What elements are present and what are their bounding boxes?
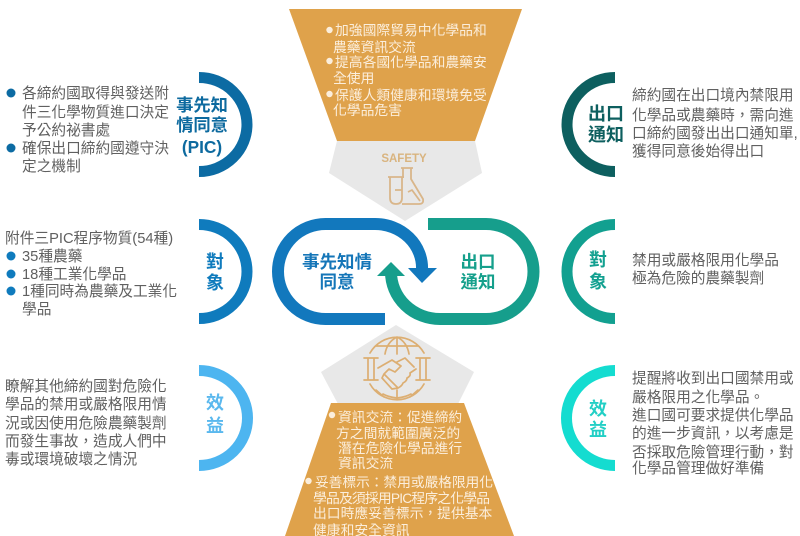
- arc label: 對: [206, 252, 224, 272]
- benefits text: 潛在危險化學品進行: [338, 441, 462, 456]
- text: 締約國在出口境內禁限用: [632, 86, 794, 104]
- arc label: 通知: [588, 125, 624, 145]
- objectives text: 農藥資訊交流: [333, 39, 416, 55]
- text: 件三化學物質進口決定: [22, 103, 169, 121]
- arc label: 象: [206, 273, 224, 293]
- text: 1種同時為農藥及工業化: [22, 283, 177, 300]
- right pillar: [416, 358, 430, 380]
- text: [632, 86, 798, 160]
- globe top: [370, 337, 424, 354]
- test tube and flask: [388, 168, 423, 204]
- arc: [199, 224, 247, 318]
- text: 的進一步資訊，以考慮是: [632, 425, 794, 442]
- benefits text: 方之間就範圍廣泛的: [336, 425, 460, 441]
- text: [632, 251, 779, 287]
- arc label: [589, 399, 607, 440]
- text: 獲得同意後始得出口: [632, 142, 764, 160]
- centre label: export notification: 出口: [460, 252, 496, 272]
- text: [632, 370, 794, 477]
- benefits text: 資訊交流: [338, 455, 393, 471]
- panel: left benefits: [5, 370, 248, 468]
- objectives text: 化學品危害: [333, 103, 402, 118]
- benefits text: 出口時應妥善標示，提供基本: [313, 505, 493, 521]
- text: 毒或環境破壞之情況: [5, 450, 138, 468]
- text: [5, 229, 177, 318]
- arc: [567, 224, 615, 318]
- text: 提醒將收到出口國禁用或: [632, 370, 794, 387]
- centre label: prior informed consent: 同意: [320, 272, 354, 292]
- arc label: [206, 252, 224, 293]
- text: 極為危險的農藥製劑: [632, 270, 764, 287]
- text: 化學品管理做好準備: [632, 459, 764, 477]
- arc: [199, 370, 248, 466]
- panel: top safety pentagon: [329, 141, 482, 221]
- text: 予公約祕書處: [22, 122, 110, 139]
- panel: bottom benefits trapezoid: [285, 403, 514, 536]
- arc label: [588, 104, 624, 145]
- text: 況或因使用危險農藥製劑: [5, 415, 167, 432]
- text: 35種農藥: [22, 248, 82, 265]
- teal loop arrow: [377, 224, 534, 319]
- text: 附件三PIC程序物質(54種): [5, 229, 173, 247]
- panel: left target substances: [5, 224, 247, 318]
- text: 瞭解其他締約國對危險化: [5, 378, 167, 395]
- objectives text: 全使用: [333, 70, 374, 86]
- bullets: [6, 252, 16, 296]
- benefits bullets: [305, 412, 335, 484]
- arc: [566, 370, 615, 466]
- safety label: SAFETY: [381, 153, 427, 165]
- handshake: [378, 358, 416, 389]
- arc label: 效: [206, 393, 224, 413]
- arc: [567, 78, 615, 172]
- bullets: [6, 88, 16, 152]
- panel: top objectives trapezoid: [289, 9, 522, 141]
- text: 學品: [22, 300, 51, 318]
- arc label: (PIC): [182, 137, 222, 157]
- arc label: [176, 95, 228, 157]
- text: 確保出口締約國遵守決: [22, 139, 169, 157]
- text: 否採取危險管理行動，對: [632, 443, 794, 461]
- arc label: 出口: [588, 104, 624, 124]
- text: 化學品或農藥時，需向進: [632, 106, 794, 124]
- arc label: [589, 250, 607, 292]
- text: 進口國可要求提供化學品: [632, 406, 794, 424]
- arc label: 象: [589, 272, 607, 292]
- panel: bottom handshake pentagon: [321, 325, 474, 404]
- arc: [199, 78, 247, 172]
- text: 嚴格限用之化學品。: [632, 388, 764, 406]
- text: [22, 85, 169, 175]
- arc label: 情同意: [176, 115, 228, 135]
- benefits text: 資訊交流：促進締約: [338, 409, 462, 425]
- objectives text: 保護人類健康和環境免受: [335, 87, 487, 103]
- text: 而發生事故，造成人們中: [5, 433, 167, 450]
- arc label: 事先知: [176, 95, 228, 115]
- objectives bullets: [326, 27, 333, 97]
- benefits text: 妥善標示：禁用或嚴格限用化: [315, 474, 493, 490]
- trapezoid shape: [285, 403, 514, 536]
- benefits text: 學品及須採用PIC程序之化學品: [313, 491, 490, 506]
- text: [5, 378, 167, 468]
- arc label: [206, 393, 224, 436]
- objectives text: 提高各國化學品和農藥安: [335, 54, 487, 70]
- icon: safety flask: [381, 153, 427, 204]
- arc label: 效: [589, 399, 607, 419]
- text: 18種工業化學品: [22, 265, 126, 283]
- centre label: export notification: [460, 252, 496, 292]
- text: 各締約國取得與發送附: [22, 85, 169, 102]
- centre label: export notification: 通知: [460, 272, 496, 292]
- globe bottom: [370, 384, 424, 400]
- benefits text: [313, 409, 493, 536]
- left pillar: [364, 358, 378, 380]
- text: 禁用或嚴格限用化學品: [632, 251, 779, 269]
- panel: right export notification description: [567, 78, 798, 172]
- objectives text: [333, 23, 487, 118]
- text: 定之機制: [22, 158, 81, 175]
- panel: right target substances: [567, 224, 779, 318]
- text: 口締約國發出出口通知單,: [632, 125, 798, 142]
- panel: right benefits: [566, 370, 794, 477]
- centre label: prior informed consent: [302, 252, 372, 292]
- objectives text: 加強國際貿易中化學品和: [335, 23, 487, 38]
- chart: central PIC and export notification loop: [278, 224, 534, 319]
- arc label: 對: [589, 250, 607, 270]
- centre label: prior informed consent: 事先知情: [302, 252, 372, 272]
- panel: left PIC description: [6, 78, 247, 175]
- arc label: 益: [589, 420, 607, 440]
- arc label: 益: [206, 416, 224, 436]
- text: 學品的禁用或嚴格限用情: [5, 395, 167, 413]
- icon: globe and handshake: [364, 337, 430, 400]
- trapezoid shape: [289, 9, 522, 141]
- blue loop arrow: [278, 224, 437, 319]
